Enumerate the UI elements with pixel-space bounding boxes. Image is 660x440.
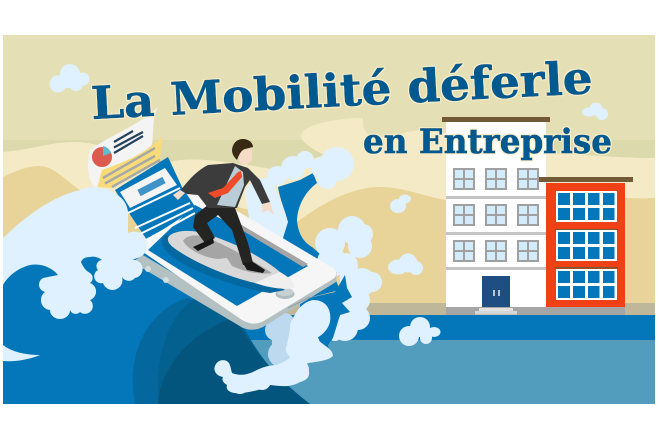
window panes [558, 193, 614, 298]
foam behind surfer [245, 178, 289, 242]
shirt [217, 166, 244, 207]
title line 2: en Entreprise [363, 122, 612, 162]
smartphone [132, 183, 337, 330]
tie [208, 171, 242, 198]
building base and steps [446, 307, 625, 315]
cloud top right [582, 102, 608, 120]
ground strip [286, 303, 655, 315]
cloud on water [399, 317, 440, 346]
sand dunes [3, 118, 655, 310]
hands [173, 190, 274, 215]
blue splash spikes [300, 275, 352, 348]
speaker and buttons [145, 266, 310, 308]
mid foam splash [315, 216, 373, 277]
surfer [173, 139, 274, 273]
right wave curl [278, 173, 340, 300]
jacket [181, 163, 270, 208]
windows [454, 169, 538, 261]
cloud top left [50, 64, 90, 92]
white building [442, 117, 550, 308]
white report page [88, 107, 158, 190]
documents [88, 107, 196, 240]
pie chart [92, 146, 112, 167]
home button [276, 288, 294, 299]
foam trail [214, 300, 333, 394]
wave tube shading [133, 298, 310, 404]
legs [193, 205, 253, 265]
translucent foam lobe [265, 313, 294, 367]
face [238, 148, 252, 165]
crescent of foam [3, 345, 40, 361]
upper foam splash [267, 147, 354, 189]
surfboard [162, 231, 294, 293]
red building [539, 177, 633, 307]
door [482, 276, 510, 308]
report text lines [114, 131, 143, 153]
hair [232, 139, 253, 160]
roof [539, 177, 633, 182]
sea [244, 315, 655, 404]
blue page [115, 157, 196, 240]
sky background [3, 35, 655, 169]
cloud middle [390, 194, 411, 213]
phone face [140, 183, 336, 324]
screen top edge [240, 224, 308, 267]
title [91, 60, 612, 162]
phone side [132, 255, 337, 330]
main wave body [3, 250, 310, 404]
cloud near building [388, 254, 423, 275]
roof [442, 117, 550, 122]
phone screen [148, 205, 308, 306]
large left foam crest [3, 187, 147, 319]
shoes [193, 238, 265, 273]
yellow page [97, 137, 162, 188]
title line 1: La Mobilité déferle [91, 60, 592, 120]
lower right foam [327, 268, 382, 341]
